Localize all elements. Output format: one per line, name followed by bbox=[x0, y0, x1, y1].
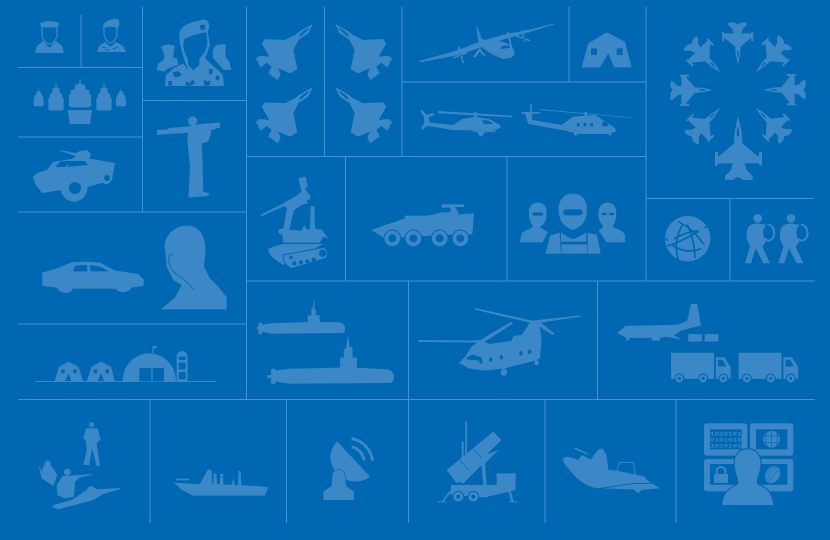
icon: escort ships bbox=[34, 82, 126, 111]
icon: bomb disposal robot bbox=[260, 177, 328, 269]
icon: fighter formation bbox=[670, 22, 806, 180]
icon: flagship bbox=[68, 79, 92, 124]
icon: cargo plane and trucks bbox=[617, 304, 798, 383]
icon: armoured personnel carrier bbox=[371, 204, 474, 247]
icon: soldier with launcher bbox=[157, 116, 220, 198]
icon: naval officer bbox=[35, 21, 64, 53]
icon: fast attack boat bbox=[563, 448, 660, 493]
icon: cargo pallets bbox=[688, 334, 718, 342]
icon: padlock panel bbox=[704, 459, 747, 491]
icon: patrol boat bbox=[174, 469, 268, 496]
icon: base camp bbox=[35, 346, 217, 382]
icon: globe panel bbox=[750, 423, 793, 456]
icon: transport aircraft bbox=[419, 23, 554, 63]
icon: fingerprint panel bbox=[750, 459, 793, 491]
icon: fighter bottom left bbox=[256, 87, 313, 143]
icon: fighter top right bbox=[335, 24, 392, 80]
icon: cargo plane bbox=[617, 304, 701, 340]
icon: missile launcher bbox=[438, 422, 518, 502]
icon: binary data panel: 1010101 bbox=[710, 430, 742, 437]
icon: infantry squad bbox=[38, 422, 121, 509]
icon: armoured car bbox=[33, 150, 115, 202]
icon: guard one bbox=[745, 214, 774, 263]
icon: fighter bottom right bbox=[335, 87, 392, 143]
icon: attack helicopter bbox=[420, 109, 512, 136]
icon: small submarine bbox=[257, 301, 345, 334]
icon: sedan car bbox=[42, 262, 144, 293]
icon: transport helicopter bbox=[522, 104, 631, 136]
icon: guards with shields bbox=[745, 214, 808, 263]
icon: army soldier bbox=[97, 19, 126, 52]
icon: security guard with earpiece bbox=[161, 226, 227, 309]
icon: binary data panel bbox=[704, 423, 747, 456]
icon: truck one bbox=[671, 353, 731, 383]
icon: cyber security operator bbox=[704, 423, 793, 505]
icon: submarines bbox=[257, 301, 394, 384]
icon: ring of fighters bbox=[670, 22, 806, 149]
icon: fighter top left bbox=[256, 24, 313, 80]
icon: masked special forces bbox=[520, 194, 625, 254]
icon: commander with two soldiers bbox=[157, 20, 231, 86]
icon: left soldier bbox=[157, 45, 178, 72]
icon: operator silhouette bbox=[722, 449, 773, 505]
icon: globe network bbox=[665, 216, 710, 261]
icon: lead fighter bbox=[715, 116, 762, 180]
icon: guard two bbox=[778, 214, 808, 263]
icon: chinook helicopter bbox=[418, 308, 581, 376]
icon: stealth fighters bbox=[256, 24, 392, 143]
icon: right soldier bbox=[213, 44, 231, 70]
icon: large submarine bbox=[267, 337, 394, 384]
icon: truck two bbox=[739, 353, 798, 383]
icon: naval fleet bbox=[34, 79, 126, 124]
icon: tent bbox=[582, 32, 632, 67]
icon: satellite dish bbox=[323, 439, 373, 500]
icon: binary data panel: 0101010 bbox=[710, 436, 742, 443]
icon: commander head bbox=[179, 20, 210, 71]
icon: binary data panel: 1010101 bbox=[710, 443, 742, 450]
icon: commander body bbox=[165, 58, 224, 86]
